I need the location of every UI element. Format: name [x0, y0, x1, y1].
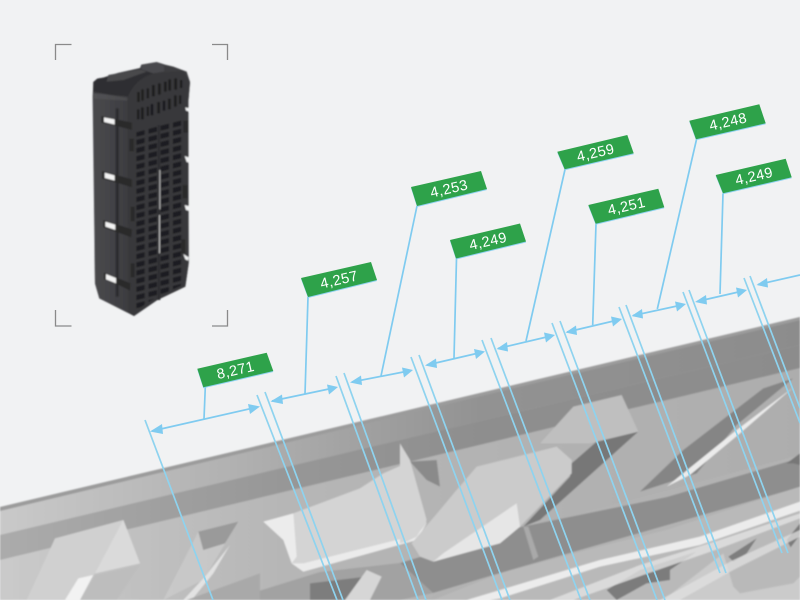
connector body	[93, 62, 190, 316]
top shoulder cap	[93, 69, 157, 98]
label: 4,248: 4,248	[708, 110, 749, 135]
centre light slits	[159, 170, 160, 253]
centre rib	[157, 125, 160, 300]
label: 4,249 left	[450, 224, 526, 260]
measure 4,251	[566, 224, 622, 335]
measure 8,271	[150, 387, 260, 434]
centre boxes and right bar	[400, 378, 793, 562]
side clips	[101, 116, 132, 291]
label: 4,259: 4,259	[575, 141, 616, 166]
side notches	[183, 107, 190, 261]
label: 4,251: 4,251	[606, 195, 647, 219]
centre-left box	[263, 460, 460, 600]
front face	[127, 71, 190, 316]
label: 4,249 right	[716, 159, 792, 194]
measure 4,257	[270, 297, 338, 404]
measure cut off at right	[756, 275, 800, 288]
dimension arrows and leaders	[150, 140, 800, 434]
dimension extension lines	[145, 276, 800, 600]
label: 4,249 left: 4,249	[468, 230, 509, 254]
label: 4,257: 4,257	[319, 268, 360, 293]
right edge tabs	[129, 121, 188, 277]
measure 4,253	[350, 206, 417, 385]
label: 4,259	[557, 135, 634, 170]
label: 4,248	[689, 104, 766, 140]
label: 8,271	[197, 353, 273, 388]
side rail	[116, 108, 119, 297]
label: 4,253: 4,253	[429, 177, 470, 202]
connector scan cross-section	[0, 317, 800, 600]
measure 4,249 right	[695, 194, 747, 304]
lower shadow band	[400, 458, 800, 593]
label: 4,257	[301, 262, 377, 298]
lower-right streak zone	[433, 453, 800, 600]
top vent slots	[137, 78, 182, 119]
label: 4,251	[588, 189, 664, 225]
measure 4,248	[632, 140, 696, 318]
measure 4,249	[425, 258, 485, 368]
product image: black multi-pin connector	[93, 62, 190, 317]
label: 4,253	[411, 171, 487, 207]
viewfinder frame corners	[56, 44, 228, 326]
left translucent details	[27, 520, 260, 600]
side face	[93, 93, 129, 313]
measure 4,259	[496, 170, 565, 352]
label: 8,271: 8,271	[215, 359, 256, 383]
pin cavity grid	[136, 120, 182, 308]
label: 4,249 right: 4,249	[734, 165, 775, 189]
